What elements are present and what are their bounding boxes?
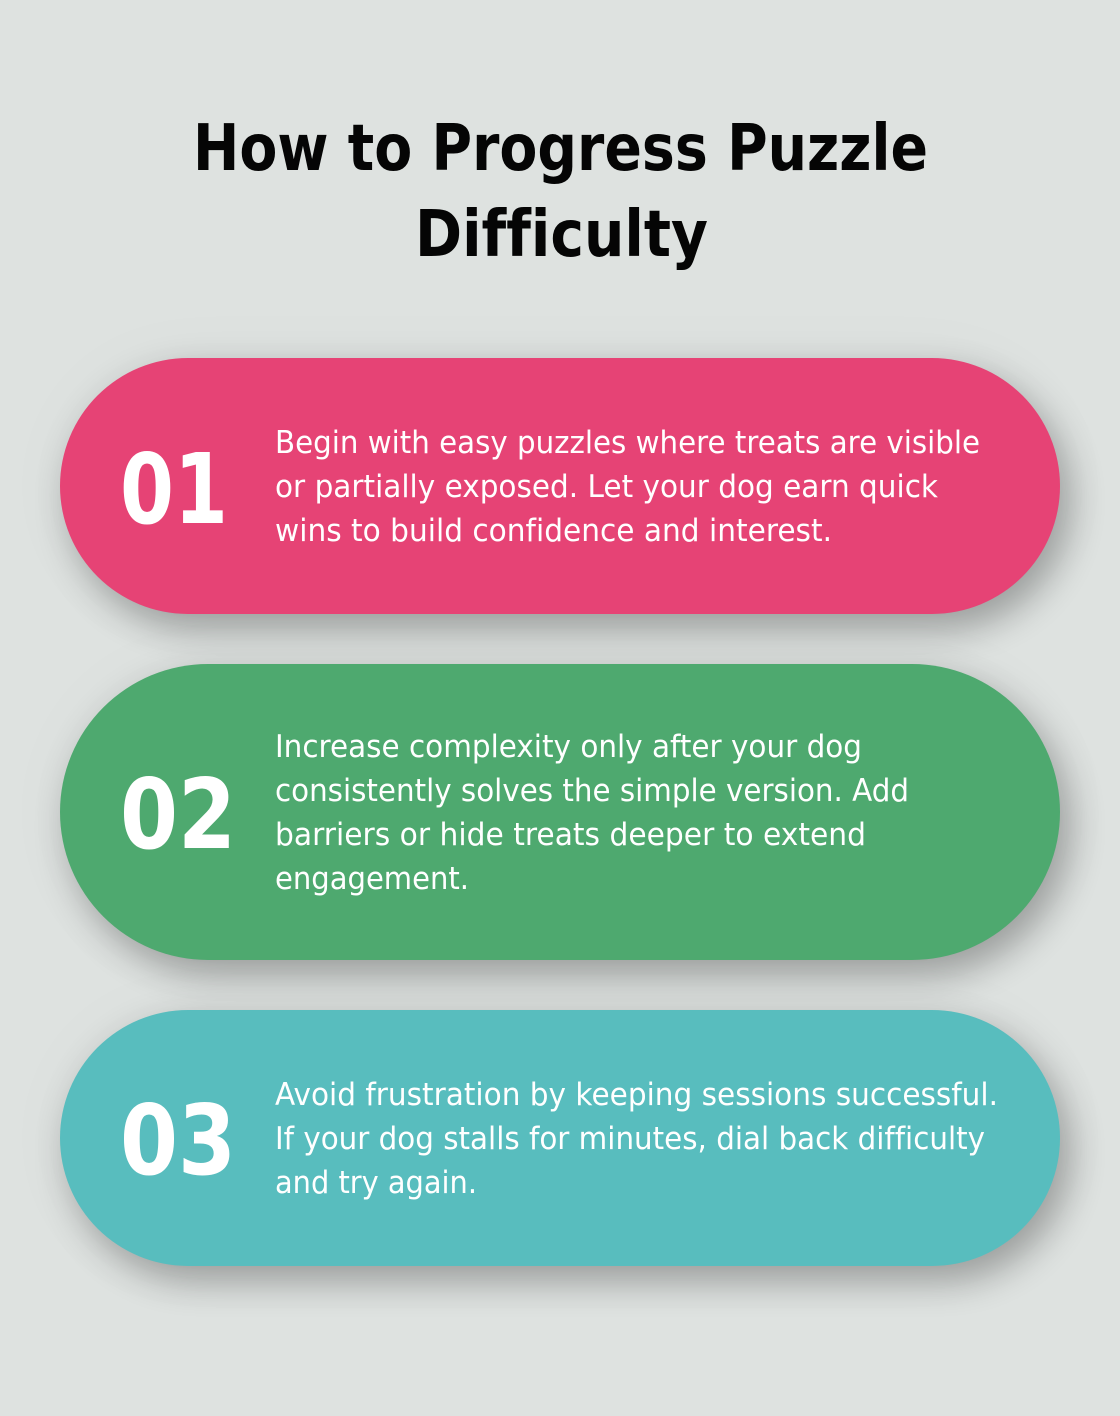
step 02 description: Increase complexity only after your dog <box>275 729 862 765</box>
step 03 description: Avoid frustration by keeping sessions successful. <box>275 1077 998 1113</box>
step 02 description: consistently solves the simple version. Add <box>275 773 909 809</box>
step 03 description <box>275 1077 998 1201</box>
step number 02: 02 <box>120 758 236 871</box>
step 01 description <box>275 425 980 549</box>
step 01 description: wins to build confidence and interest. <box>275 513 832 549</box>
step 01 description: Begin with easy puzzles where treats are visible <box>275 425 980 461</box>
title: How to Progress Puzzle <box>193 112 928 186</box>
title: Difficulty <box>415 198 708 272</box>
step 02 description: engagement. <box>275 861 469 897</box>
green pill background <box>60 664 1060 960</box>
step 03 description: If your dog stalls for minutes, dial back difficulty <box>275 1121 985 1157</box>
panel: step 03 <box>60 1010 1060 1266</box>
step 02 description <box>275 729 909 897</box>
step number 03: 03 <box>120 1084 236 1197</box>
step number 01: 01 <box>120 433 228 546</box>
panel: step 01 <box>60 358 1060 614</box>
step 03 description: and try again. <box>275 1165 477 1201</box>
panel: step 02 <box>60 664 1060 960</box>
title <box>193 112 928 272</box>
step 02 description: barriers or hide treats deeper to extend <box>275 817 866 853</box>
step 01 description: or partially exposed. Let your dog earn quick <box>275 469 938 505</box>
pink pill background <box>60 358 1060 614</box>
teal pill background <box>60 1010 1060 1266</box>
